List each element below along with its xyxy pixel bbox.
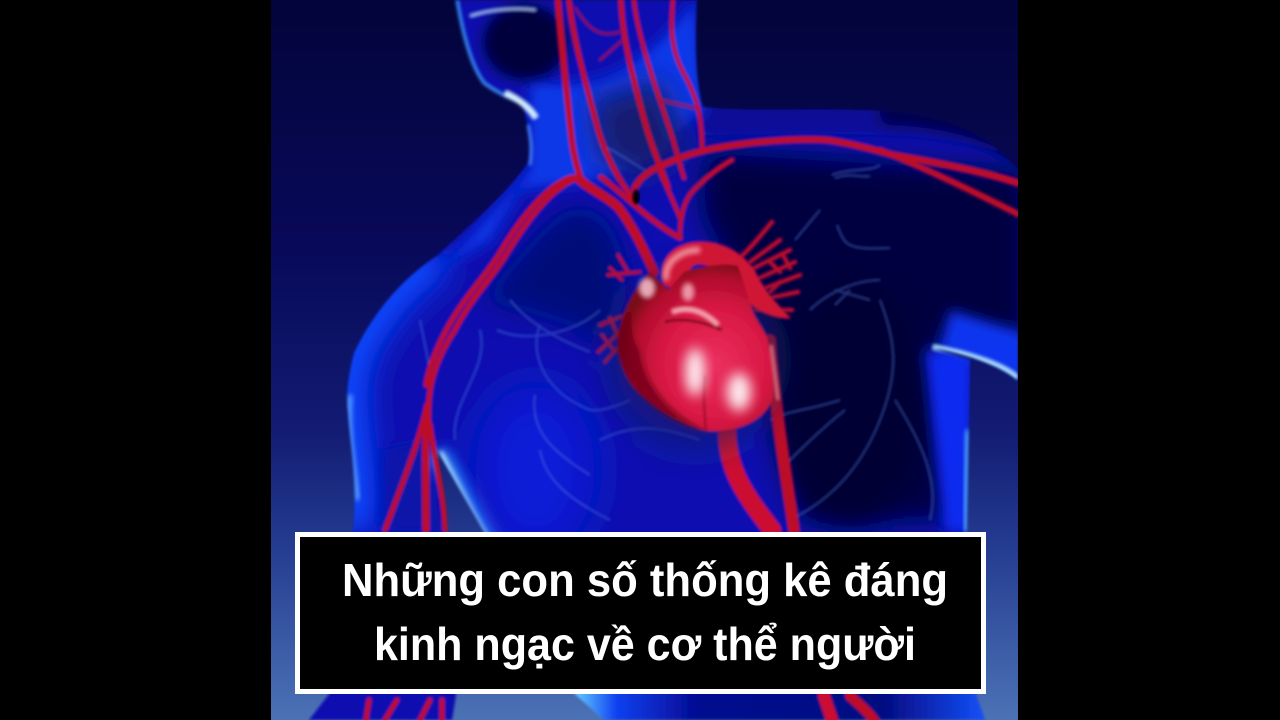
caption line 2: kinh ngạc về cơ thể người — [374, 618, 916, 670]
neck arteries — [558, 0, 581, 180]
neck and jaw highlights — [457, 0, 536, 165]
neck glow — [440, 0, 705, 270]
ventricle highlights — [685, 348, 705, 396]
rib cage and chest contour lines — [420, 145, 933, 520]
heart dark halo — [603, 270, 787, 450]
black vessel shadow — [632, 189, 640, 205]
descending arteries — [727, 430, 772, 530]
illustration: human circulatory system — [271, 0, 1030, 720]
icon: heart — [603, 242, 790, 450]
coronary groove — [665, 320, 722, 330]
inner arm rim — [422, 438, 504, 532]
dark ribcage centre — [775, 275, 925, 525]
shoulder top fade — [692, 106, 1014, 165]
descending aorta highlight — [771, 345, 778, 400]
pulmonary trunk and upper chambers — [618, 265, 774, 431]
heart bottom-left shading — [618, 310, 708, 431]
lower body below caption — [575, 694, 986, 720]
dark area under collarbone — [480, 208, 626, 345]
soft-focus artwork — [271, 0, 1030, 720]
face shadow — [483, 4, 567, 80]
coronary branches, right — [735, 222, 800, 310]
left arm glow — [347, 255, 438, 532]
right arm underside glow — [940, 310, 1030, 385]
carotid to heart — [578, 178, 654, 272]
coronary branches, left — [598, 255, 640, 362]
arteries — [366, 0, 1018, 720]
caption box — [298, 534, 984, 692]
atrium highlights — [639, 278, 655, 298]
image background — [271, 0, 1018, 720]
caption line 1: Những con số thống kê đáng — [342, 554, 948, 606]
body silhouette — [271, 0, 1030, 720]
lower torso glow — [475, 385, 595, 555]
arm interior shade — [385, 440, 445, 530]
left arm arteries — [428, 178, 578, 432]
right flank glow — [925, 350, 972, 532]
aortic arch — [662, 242, 790, 318]
upper right chest and shoulder shadow — [700, 150, 1030, 520]
right subclavian — [634, 139, 1018, 190]
